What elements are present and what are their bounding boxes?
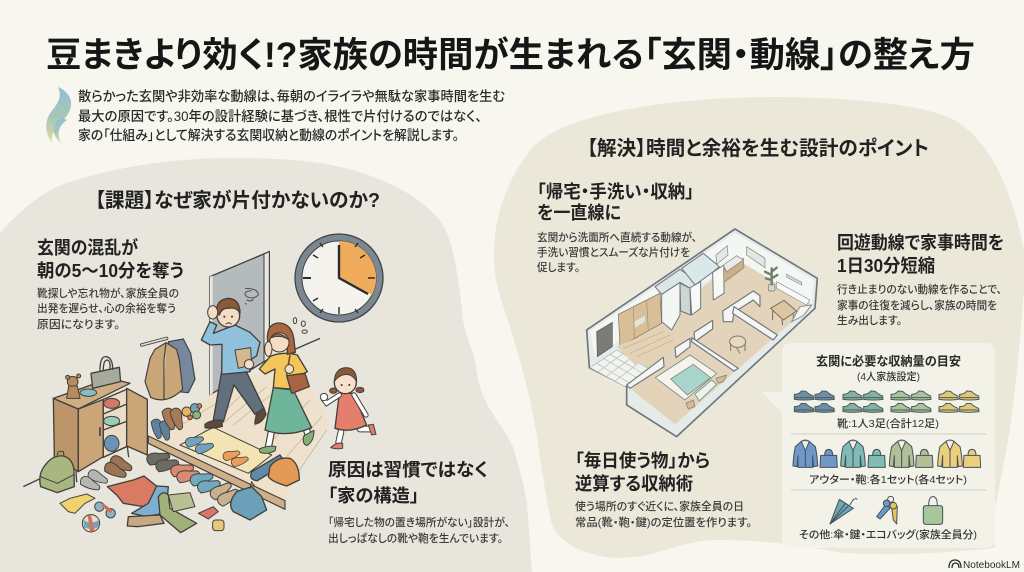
callout: storage guide card: [762, 343, 995, 548]
back walls: [590, 233, 735, 357]
wooden floor: [23, 338, 330, 509]
text block: root cause: 「家の構造」: [328, 486, 419, 506]
text block: root cause: 「帰宅した物の置き場所がない」設計が、: [328, 515, 510, 529]
father: [201, 298, 266, 428]
illustration: chaotic entrance: [23, 234, 383, 533]
text block: straight route: 促します。: [537, 260, 580, 274]
card heading: (4人家族設定): [857, 370, 920, 383]
text block: straight route: 手洗い習慣とスムーズな片付けを: [537, 245, 690, 259]
text block: morning chaos: 朝の5〜10分を奪う: [37, 260, 184, 281]
doormat and slippers: [180, 427, 272, 473]
text block: loop route: 1日30分短縮: [837, 256, 935, 276]
text block: root cause: 原因は習慣ではなく: [328, 460, 488, 480]
text block: loop route: 生み出します。: [837, 313, 902, 327]
text block: morning chaos: [37, 237, 184, 331]
door: [210, 252, 269, 395]
interior walls: [627, 291, 777, 388]
intro text: 家の「仕組み」として解決する玄関収納と動線のポイントを解説します。: [78, 127, 459, 143]
scattered items: [40, 404, 299, 533]
heading: solution section: 【解決】時間と余裕を生む設計のポイント: [587, 137, 929, 160]
text block: straight route: [537, 182, 697, 274]
other items caption: その他:傘・鍵・エコバッグ(家族全員分): [799, 528, 977, 541]
intro text: [78, 88, 505, 143]
illustration: isometric floor plan: [587, 229, 817, 437]
living room table: [730, 336, 746, 353]
text block: loop route: [837, 232, 1004, 327]
text block: morning chaos: 靴探しや忘れ物が、家族全員の: [37, 286, 179, 300]
dining table: [771, 300, 812, 325]
bathroom blocks: [655, 253, 724, 330]
family: rushing people: [201, 298, 376, 453]
text block: morning chaos: 出発を遅らせ、心の余裕を奪う: [37, 301, 176, 315]
text block: daily items storage: 常品(靴・鞄・鍵)の定位置を作ります。: [575, 515, 752, 529]
plant and wall vent: [765, 268, 810, 305]
logo: NotebookLM: NotebookLM: [963, 559, 1020, 571]
text block: root cause: [328, 460, 510, 545]
bedroom: [638, 355, 727, 410]
text block: loop route: 行き止まりのない動線を作ることで、: [837, 282, 1002, 296]
daughter: [320, 368, 376, 449]
kitchen: [716, 246, 765, 282]
tile entrance: [590, 350, 648, 387]
text block: daily items storage: 使う場所のすぐ近くに、家族全員の日: [575, 499, 744, 513]
text block: daily items storage: 逆算する収納術: [575, 473, 693, 494]
shoes caption: 靴:1人3足(合計12足): [837, 417, 939, 430]
floor: [620, 258, 812, 424]
intro text: 最大の原因です。30年の設計経験に基づき、根性で片付けるのではなく、: [78, 108, 482, 124]
mother: [259, 318, 314, 453]
icon: smoke swirl: [46, 87, 71, 144]
text block: straight route: 玄関から洗面所へ直続する動線が、: [537, 230, 697, 244]
text block: morning chaos: 原因になります。: [37, 318, 120, 331]
heading: problem section: 【課題】なぜ家が片付かないのか?: [95, 188, 380, 212]
clothes rack and coats: [142, 338, 195, 400]
icon: wall clock: [295, 234, 383, 322]
outerwear caption: アウター・鞄:各1セット(各4セット): [809, 473, 967, 486]
shoe cabinet: [53, 357, 147, 482]
text block: loop route: 回遊動線で家事時間を: [837, 232, 1004, 253]
panel: problem background blob: [0, 158, 532, 572]
card heading: 玄関に必要な収納量の目安: [816, 354, 961, 368]
closet: [617, 293, 677, 365]
card heading: [816, 354, 961, 383]
outerwear and bags row: [793, 440, 981, 467]
other items icons: [830, 496, 943, 524]
outer shell: [587, 229, 817, 437]
text block: loop route: 家事の往復を減らし、家族の時間を: [837, 298, 997, 312]
shoes row: [794, 391, 979, 412]
text block: morning chaos: 玄関の混乱が: [37, 237, 138, 258]
panel: solution background blob: [494, 97, 1024, 558]
title: 豆まきより効く!?家族の時間が生まれる「玄関・動線」の整え方: [46, 36, 975, 75]
text block: straight route: 「帰宅・手洗い・収納」: [537, 182, 694, 202]
front door: [597, 322, 612, 357]
text block: root cause: 出しっぱなしの靴や鞄を生んでいます。: [328, 531, 503, 545]
text block: daily items storage: [575, 451, 752, 529]
text block: daily items storage: 「毎日使う物」から: [575, 451, 710, 471]
text block: straight route: を一直線に: [537, 203, 621, 223]
intro text: 散らかった玄関や非効率な動線は、毎朝のイライラや無駄な家事時間を生む: [78, 88, 505, 104]
